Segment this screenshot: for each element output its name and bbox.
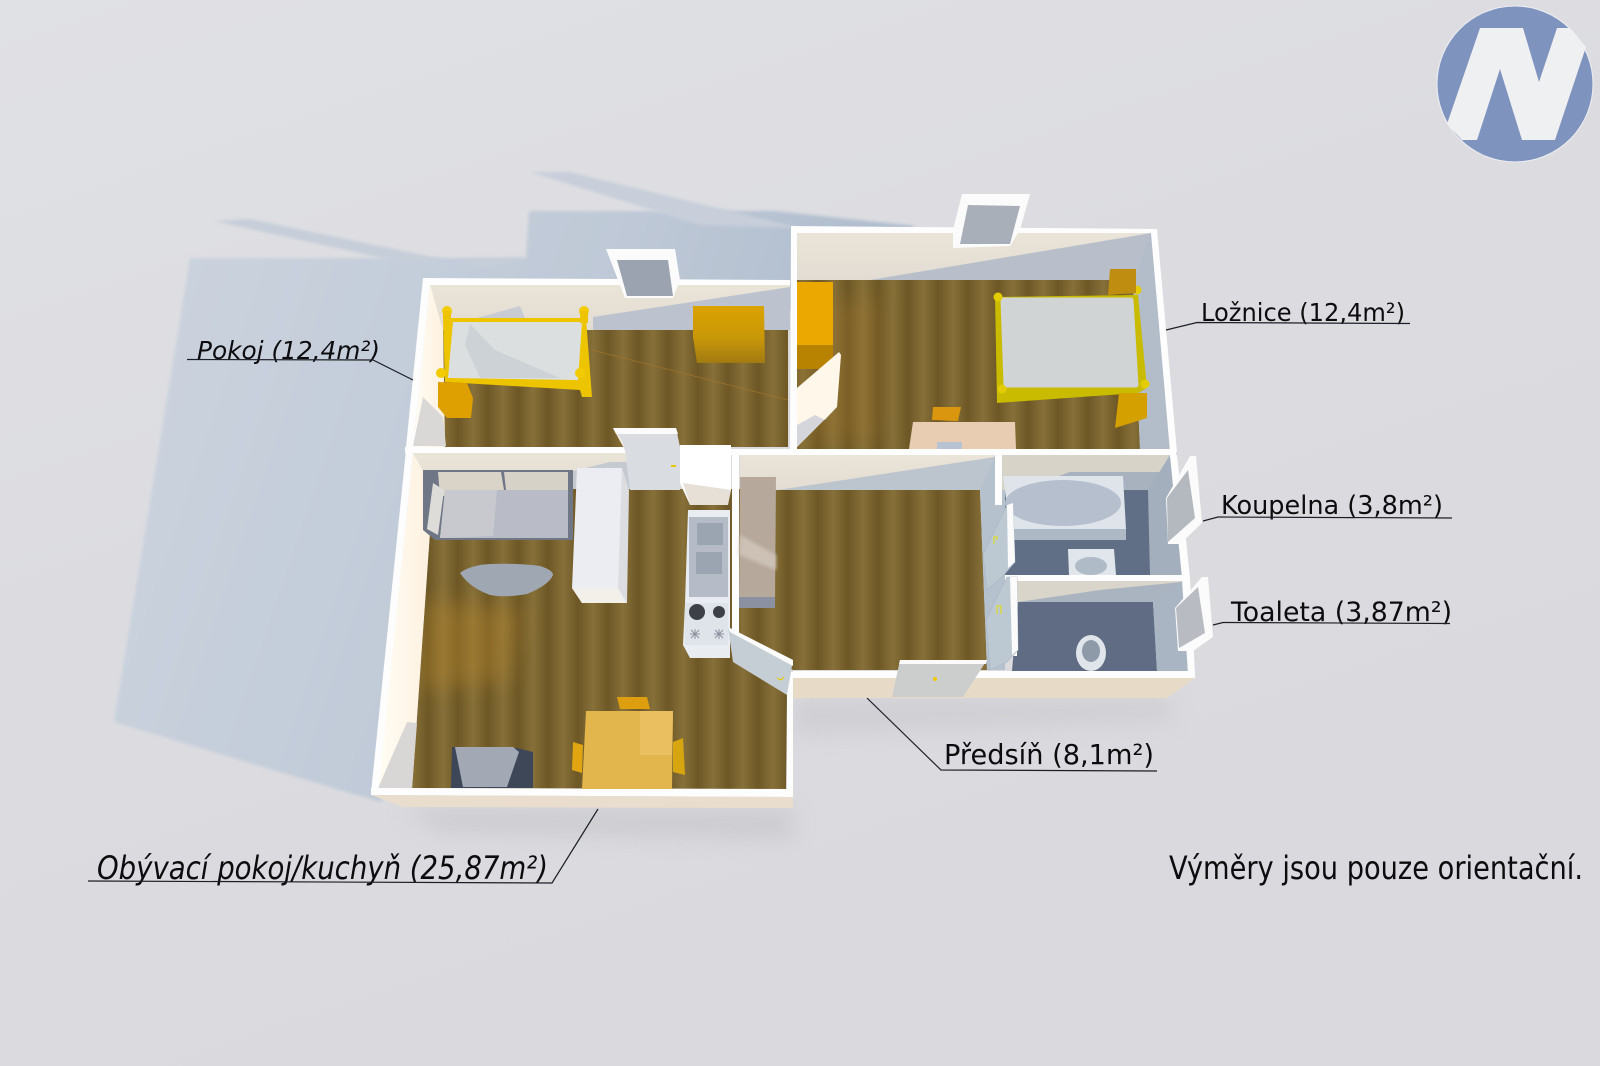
wall tops xyxy=(371,226,1195,797)
door: Pokoj to living room xyxy=(613,428,680,490)
window: Ložnice xyxy=(953,194,1030,248)
kitchen block xyxy=(680,445,731,658)
label: Pokoj: Pokoj (12,4m²) xyxy=(197,336,380,365)
armchair xyxy=(451,747,533,788)
toilet xyxy=(1076,635,1106,671)
right wall: bathroom xyxy=(1148,455,1182,575)
right wall: hall xyxy=(980,455,1005,670)
floor: Pokoj xyxy=(443,330,788,447)
window: Pokoj xyxy=(606,249,680,298)
lit left wall: living room xyxy=(378,453,433,788)
front wall face: living room xyxy=(371,795,793,808)
shadow streak upper right xyxy=(530,172,800,228)
logo xyxy=(1437,6,1593,162)
lit left wall: Pokoj xyxy=(413,284,446,447)
kitchen unit xyxy=(572,468,629,603)
window: bathroom xyxy=(1166,456,1202,544)
back wall: toilet xyxy=(1017,581,1182,602)
label: Koupelna: Koupelna (3,8m²) xyxy=(1221,491,1443,521)
front wall face: hall and baths xyxy=(793,678,1195,698)
Pokoj bed xyxy=(436,306,592,397)
entrance door xyxy=(892,660,987,697)
floor: bathroom xyxy=(1002,490,1152,575)
Ložnice wardrobe xyxy=(797,282,833,369)
floor: toilet xyxy=(1012,602,1157,671)
Pokoj bedside table xyxy=(438,382,473,418)
floorplan building xyxy=(371,194,1213,808)
floor: living room xyxy=(412,489,787,789)
label: Obývací pokoj/kuchyň: Obývací pokoj/kuchyň (25,87m²) xyxy=(97,849,548,887)
back wall: Pokoj xyxy=(430,284,790,330)
door: hall to living room xyxy=(728,627,793,695)
Ložnice desk with chair xyxy=(909,407,1016,449)
back wall: hall xyxy=(740,455,995,490)
coffee table xyxy=(460,564,553,596)
Ložnice bedside tables xyxy=(1108,269,1147,428)
bathtub xyxy=(1003,476,1126,540)
Pokoj dresser xyxy=(693,306,765,363)
sofa xyxy=(423,470,573,540)
right wall: toilet xyxy=(1153,581,1188,671)
label: Toaleta: Toaleta (3,87m²) xyxy=(1230,597,1452,628)
door: bathroom xyxy=(983,503,1015,590)
back wall: Ložnice xyxy=(797,232,1151,280)
hall cabinet xyxy=(739,477,776,608)
back wall: bathroom xyxy=(1002,455,1170,490)
ground contact shadow xyxy=(403,698,1170,840)
floor: hall xyxy=(733,490,987,670)
floor: Ložnice xyxy=(797,280,1140,449)
shadow streak upper left xyxy=(214,219,526,268)
Ložnice door xyxy=(797,352,841,447)
label: Předsíň: Předsíň (8,1m²) xyxy=(944,738,1154,771)
label: Obývací pokoj/kuchyň xyxy=(88,809,598,887)
washbasin xyxy=(1068,549,1116,575)
back wall: living room xyxy=(413,453,680,489)
right wall: Ložnice xyxy=(1133,232,1170,449)
window: toilet xyxy=(1175,577,1213,651)
label: Pokoj xyxy=(187,336,413,380)
label: Předsíň xyxy=(867,698,1157,771)
label: Ložnice: Ložnice (12,4m²) xyxy=(1201,298,1405,327)
Ložnice bed xyxy=(994,286,1150,403)
door: toilet xyxy=(986,577,1018,670)
dining table with chairs xyxy=(572,697,685,789)
building cast shadow xyxy=(114,172,915,802)
